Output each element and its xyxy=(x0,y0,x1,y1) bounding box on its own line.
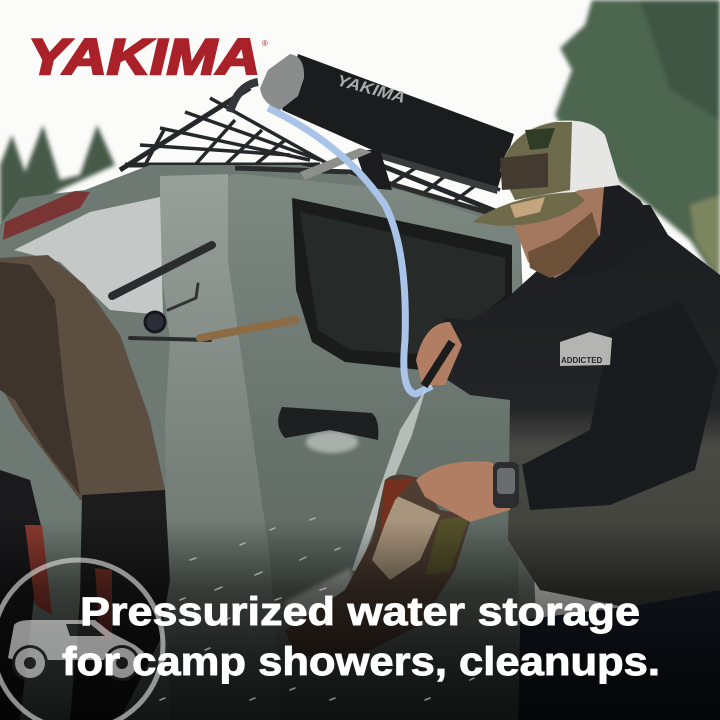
man: forward arm sleeve xyxy=(522,300,718,510)
water splash droplets xyxy=(160,518,474,700)
door handle xyxy=(278,407,378,453)
rear cab pillar xyxy=(160,174,285,720)
camo hat xyxy=(472,121,620,226)
YAKIMA logo: YAKIMA xyxy=(28,29,260,85)
headline xyxy=(62,590,660,684)
fishing rod and reel xyxy=(112,245,295,340)
jacket chest logo: ADDICTED xyxy=(561,356,603,365)
man: face xyxy=(512,185,618,278)
rear window xyxy=(14,197,163,315)
door panel xyxy=(228,174,520,720)
icon: truck silhouette xyxy=(8,620,144,660)
background trees xyxy=(0,0,720,285)
tank mount xyxy=(355,150,392,190)
blue water hose xyxy=(268,108,432,394)
man: neck hood xyxy=(560,175,662,280)
jacket chest logo xyxy=(560,332,612,366)
circular truck icon xyxy=(0,560,163,720)
tank logo: YAKIMA xyxy=(335,72,407,107)
truck body xyxy=(0,165,540,720)
YAKIMA logo: ® xyxy=(262,39,268,48)
bottom dark gradient overlay xyxy=(0,520,720,720)
hanging waders xyxy=(0,255,170,720)
jeans xyxy=(518,590,720,720)
tank end cap xyxy=(260,54,304,110)
hands and arm holding hose xyxy=(416,322,519,522)
roof rack xyxy=(120,82,500,213)
headline: Pressurized water storage xyxy=(80,590,640,634)
headline: for camp showers, cleanups. xyxy=(62,640,660,684)
boots xyxy=(285,474,472,660)
water spray xyxy=(285,388,426,628)
man: jacket torso xyxy=(430,205,720,610)
water tank xyxy=(260,54,514,194)
rear brake light xyxy=(3,191,90,240)
side window xyxy=(292,198,512,372)
roof dark edge xyxy=(235,168,500,216)
